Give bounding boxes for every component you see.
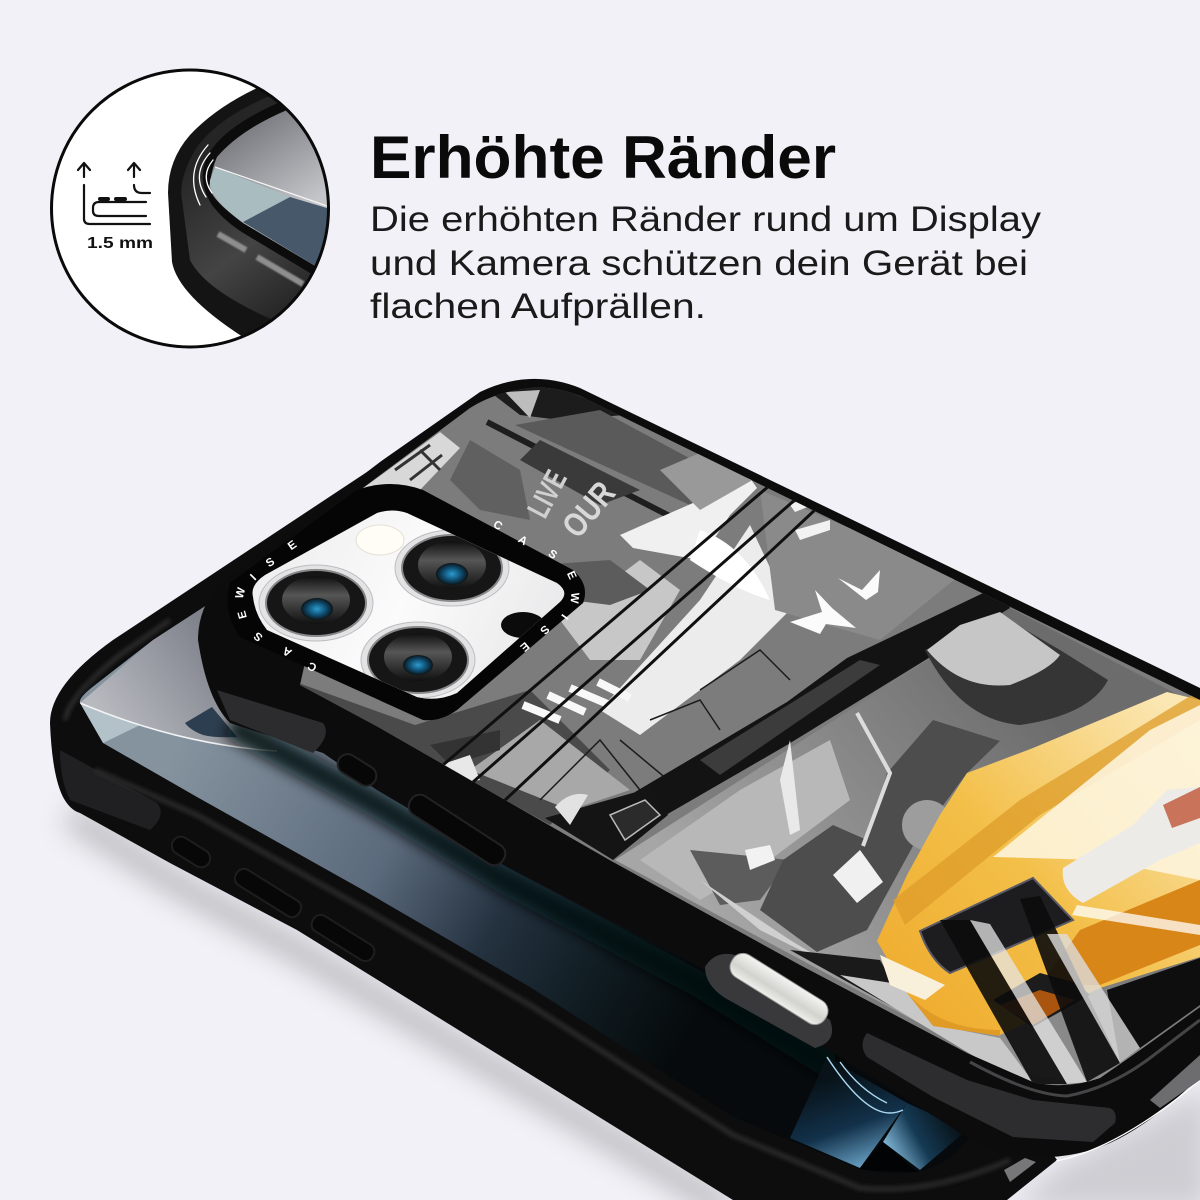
case corner close-up (168, 88, 314, 336)
description (370, 200, 1042, 326)
frame corner highlight (60, 750, 161, 830)
CASEWISE ring lettering: C (491, 519, 504, 533)
lower street pavement (840, 975, 1033, 1082)
back phone buttons (168, 833, 377, 964)
crosswalk stripes (523, 682, 630, 720)
front phone side buttons (334, 750, 509, 869)
description: flachen Aufprällen. (370, 287, 706, 326)
case frame (198, 379, 1200, 1157)
bump shaded side (217, 690, 326, 753)
front phone with artwork case (198, 379, 1200, 1161)
lens 1 (259, 565, 373, 641)
CASEWISE ring lettering: I (248, 572, 259, 583)
floor shadows (70, 815, 1200, 1200)
shadow under front phone (218, 716, 682, 984)
taxi orange body (1040, 880, 1200, 985)
CASEWISE ring lettering: W (568, 592, 580, 604)
CASEWISE ring lettering: S (252, 629, 265, 643)
description: Die erhöhten Ränder rund um Display (370, 200, 1042, 239)
CASEWISE ring lettering: E (564, 569, 578, 582)
measurement label: 1.5 mm (87, 235, 153, 252)
CASEWISE ring lettering: C (306, 659, 319, 673)
taxi headlight (1063, 787, 1200, 903)
CASEWISE ring lettering: S (264, 556, 277, 570)
right grey block (760, 490, 960, 640)
CASEWISE ring lettering: E (236, 609, 250, 620)
wires (443, 485, 817, 802)
CASEWISE ring lettering: A (281, 644, 294, 658)
charging port (705, 949, 833, 1048)
frame wall highlight pill (862, 1033, 1116, 1142)
CASEWISE ring lettering: S (546, 548, 559, 562)
CASEWISE ring lettering: E (286, 539, 299, 553)
description: und Kamera schützen dein Gerät bei (370, 244, 1028, 283)
lens 3 (361, 622, 475, 698)
title: Erhöhte Ränder (370, 124, 836, 191)
car silhouette (760, 720, 1000, 952)
lower silver edge (1004, 1158, 1036, 1182)
taxi windshield (920, 878, 1073, 973)
back phone case (50, 468, 1057, 1200)
lower left texture (290, 680, 610, 825)
flash (356, 525, 404, 555)
impact arcs (194, 145, 213, 205)
road stripes (940, 896, 1200, 1084)
back phone screen (80, 606, 962, 1172)
dark diagonal band (634, 594, 1010, 814)
live sign: LIVE (520, 464, 574, 523)
dark building with window (545, 788, 668, 860)
camera ring (228, 484, 585, 720)
CASEWISE ring lettering (234, 519, 580, 673)
CASEWISE ring lettering: A (516, 534, 529, 548)
birds (790, 570, 880, 634)
frame rim highlight (970, 1020, 1200, 1096)
camera island (252, 510, 564, 699)
yellow taxi (877, 690, 1200, 1036)
zoom circle: raised edge detail (50, 68, 330, 348)
corner speaker detail (1150, 1055, 1200, 1108)
dark ellipse (925, 628, 1108, 725)
artwork (290, 380, 1200, 1100)
collage: top city block: OUR (554, 474, 623, 545)
CASEWISE ring lettering: I (558, 612, 570, 621)
CASEWISE ring lettering: S (537, 622, 551, 636)
dark road under taxi (1107, 958, 1200, 1063)
highlight on frame (218, 234, 303, 284)
screen glass (209, 110, 327, 266)
collage: lower street (615, 608, 1200, 1085)
microphone hole (501, 612, 545, 638)
CASEWISE ring lettering: W (234, 586, 248, 600)
frame rim highlight (65, 620, 1010, 1189)
collage: top city block (290, 385, 960, 825)
CASEWISE ring lettering: E (517, 639, 531, 653)
lens 2 (395, 530, 509, 606)
back phone with screen (50, 468, 1057, 1200)
blue wallpaper streak (790, 1057, 907, 1168)
icon: raised edge diagram (78, 163, 150, 224)
